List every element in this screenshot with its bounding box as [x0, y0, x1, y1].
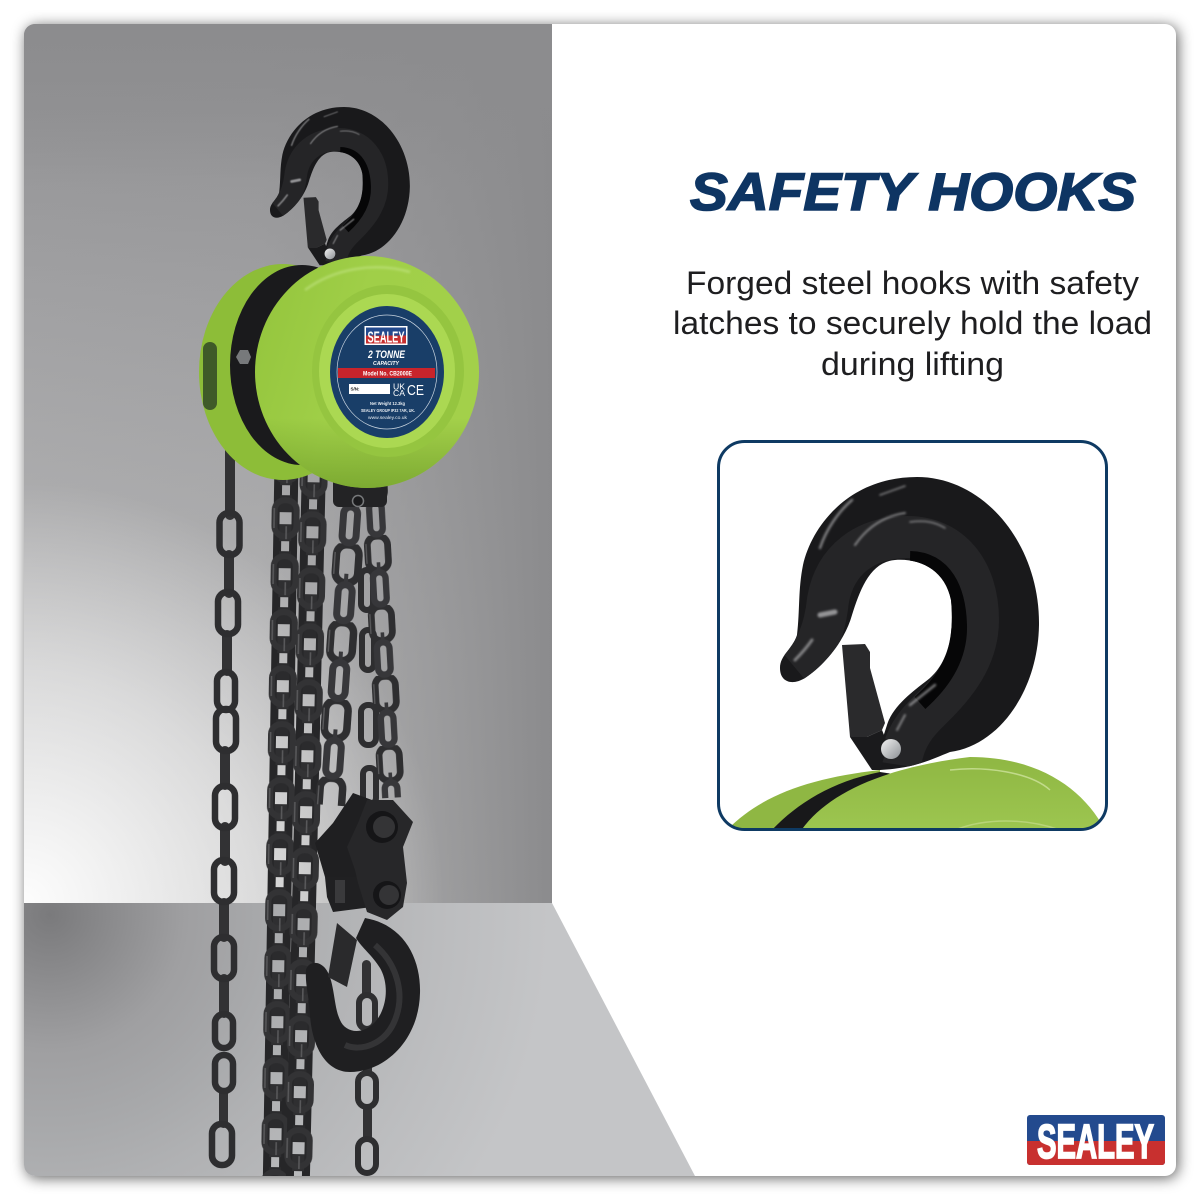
front green drum	[255, 256, 479, 488]
product label	[330, 306, 444, 438]
icon: detail hook	[780, 477, 1039, 770]
chain run 5 back	[361, 570, 376, 804]
rear green housing	[199, 264, 312, 480]
icon: top hook	[270, 107, 410, 265]
product label: CAPACITY	[373, 361, 400, 367]
UKCA and CE marks: UK	[393, 382, 406, 392]
hand chains	[212, 440, 405, 1178]
chain run 2	[261, 448, 301, 1178]
panel: product photo	[24, 24, 695, 1178]
lower hook rib	[345, 945, 399, 1048]
drum detail	[725, 757, 1106, 832]
UKCA and CE marks: CE	[407, 382, 424, 399]
lower hook latch	[328, 923, 357, 987]
icon: lower hook	[306, 918, 420, 1072]
block rear plate	[315, 793, 372, 877]
block bolt upper	[366, 811, 398, 843]
inset border	[718, 442, 1106, 830]
panel: hook detail inset	[718, 442, 1106, 832]
chain run 3	[284, 462, 328, 1178]
black centre plate	[230, 265, 318, 465]
title: SAFETY HOOKS	[690, 163, 1136, 222]
block collar	[325, 877, 366, 912]
far left chain	[212, 440, 240, 1165]
UKCA and CE marks	[393, 384, 424, 396]
housing slot	[203, 342, 217, 410]
block bolt lower	[373, 881, 401, 909]
inner dish	[319, 294, 455, 448]
label details	[361, 401, 415, 420]
label capacity: 2 TONNE	[367, 349, 406, 361]
label details: Net Weight 12.3kg	[370, 401, 405, 406]
studio floor	[24, 903, 695, 1176]
body text: latches to securely hold the load	[673, 305, 1152, 341]
inset background	[718, 442, 1106, 830]
body text: Forged steel hooks with safety	[686, 265, 1139, 301]
drum dish	[312, 285, 464, 457]
label details: SEALEY GROUP IP32 7AR, UK.	[361, 408, 415, 413]
studio wall background	[24, 24, 552, 903]
chain run 5 front	[364, 486, 404, 798]
label logo: SEALEY	[368, 330, 405, 346]
serial number box: S/N:	[350, 386, 360, 392]
bottom chain guide	[333, 482, 387, 508]
chain run 6 below hook	[358, 960, 376, 1173]
drum lower shading	[274, 434, 461, 488]
hoist body	[199, 256, 479, 507]
label details: www.sealey.co.uk	[368, 415, 408, 420]
body text: during lifting	[821, 346, 1004, 382]
lower block and hook	[306, 793, 420, 1072]
drum rim highlight	[305, 267, 410, 290]
bolt nut	[236, 350, 251, 364]
UKCA and CE marks: CA	[393, 389, 406, 398]
block front plate	[366, 800, 413, 920]
chain run 4	[317, 507, 363, 806]
body text	[673, 265, 1152, 382]
label model band: Model No. CB2000E	[363, 371, 412, 377]
